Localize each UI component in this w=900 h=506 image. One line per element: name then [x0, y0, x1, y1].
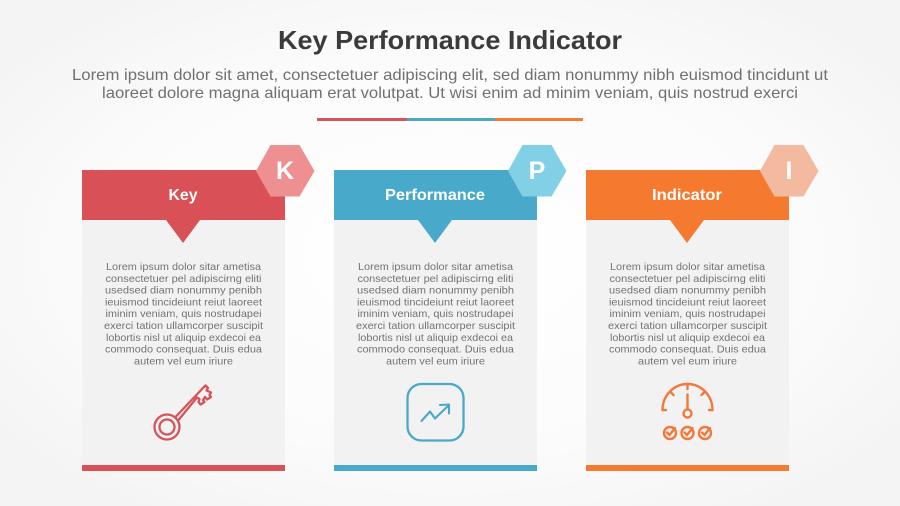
- icon: growth chart: [408, 384, 464, 440]
- body text: Lorem ipsum dolor sitar ametisa: [610, 261, 765, 273]
- body text: exerci tation ullamcorper suscipit: [356, 320, 515, 332]
- body text: ieuismod tincideiunt reiut laoreet: [609, 296, 766, 308]
- body text: lobortis nisl ut aliquip exdecoi ea: [106, 332, 261, 344]
- heading: indicator: Indicator: [652, 187, 722, 204]
- hexagon badge: K: [256, 145, 314, 196]
- body text: [356, 261, 515, 367]
- header banner: [334, 170, 537, 243]
- subtitle text: Lorem ipsum dolor sit amet, consectetuer adipiscing elit, sed diam nonummy nibh euismod tincidunt ut: [72, 67, 829, 84]
- body text: consectetuer pel adipiscirng eliti: [358, 273, 514, 285]
- body text: ieuismod tincideiunt reiut laoreet: [357, 296, 514, 308]
- panel: key: [82, 145, 314, 471]
- hexagon badge: I: I: [786, 157, 792, 185]
- hexagon badge: K: K: [276, 157, 294, 185]
- body text: consectetuer pel adipiscirng eliti: [106, 273, 262, 285]
- bottom bar: [586, 465, 789, 471]
- bottom bar: [82, 465, 285, 471]
- body text: exerci tation ullamcorper suscipit: [608, 320, 767, 332]
- hexagon badge: I: [760, 145, 818, 196]
- heading: key: Key: [168, 187, 198, 204]
- card body: [82, 220, 285, 465]
- body text: iminim veniam, quis nostrudapei: [358, 308, 514, 320]
- body text: [608, 261, 767, 367]
- header banner: [82, 170, 285, 243]
- icon: key: [154, 386, 211, 440]
- body text: commodo consequat. Duis edua: [357, 344, 514, 356]
- body text: lobortis nisl ut aliquip exdecoi ea: [358, 332, 513, 344]
- hexagon badge: P: [508, 145, 566, 196]
- hexagon badge: P: P: [529, 157, 545, 185]
- card body: [586, 220, 789, 465]
- body text: iminim veniam, quis nostrudapei: [106, 308, 262, 320]
- body text: Lorem ipsum dolor sitar ametisa: [358, 261, 513, 273]
- subtitle text: [72, 67, 829, 102]
- card body: [334, 220, 537, 465]
- body text: ieuismod tincideiunt reiut laoreet: [105, 296, 262, 308]
- body text: [104, 261, 263, 367]
- body text: usedsed diam nonummy penibh: [609, 285, 766, 297]
- body text: autem vel eum iriure: [386, 355, 485, 367]
- subtitle text: laoreet dolore magna aliquam erat volutpat. Ut wisi enim ad minim veniam, quis nostrud exerci: [102, 85, 798, 102]
- panel: indicator: [586, 145, 818, 471]
- body text: usedsed diam nonummy penibh: [105, 285, 262, 297]
- header banner: [586, 170, 789, 243]
- body text: commodo consequat. Duis edua: [609, 344, 766, 356]
- body text: usedsed diam nonummy penibh: [357, 285, 514, 297]
- panel: performance: [334, 145, 566, 471]
- body text: autem vel eum iriure: [134, 355, 233, 367]
- body text: commodo consequat. Duis edua: [105, 344, 262, 356]
- body text: Lorem ipsum dolor sitar ametisa: [106, 261, 261, 273]
- title: Key Performance Indicator: [278, 25, 622, 55]
- body text: iminim veniam, quis nostrudapei: [610, 308, 766, 320]
- body text: exerci tation ullamcorper suscipit: [104, 320, 263, 332]
- bottom bar: [334, 465, 537, 471]
- body text: lobortis nisl ut aliquip exdecoi ea: [610, 332, 765, 344]
- body text: consectetuer pel adipiscirng eliti: [610, 273, 766, 285]
- tricolor divider: [317, 118, 583, 121]
- icon: gauge with checks: [662, 384, 712, 439]
- heading: performance: Performance: [385, 187, 485, 204]
- body text: autem vel eum iriure: [638, 355, 737, 367]
